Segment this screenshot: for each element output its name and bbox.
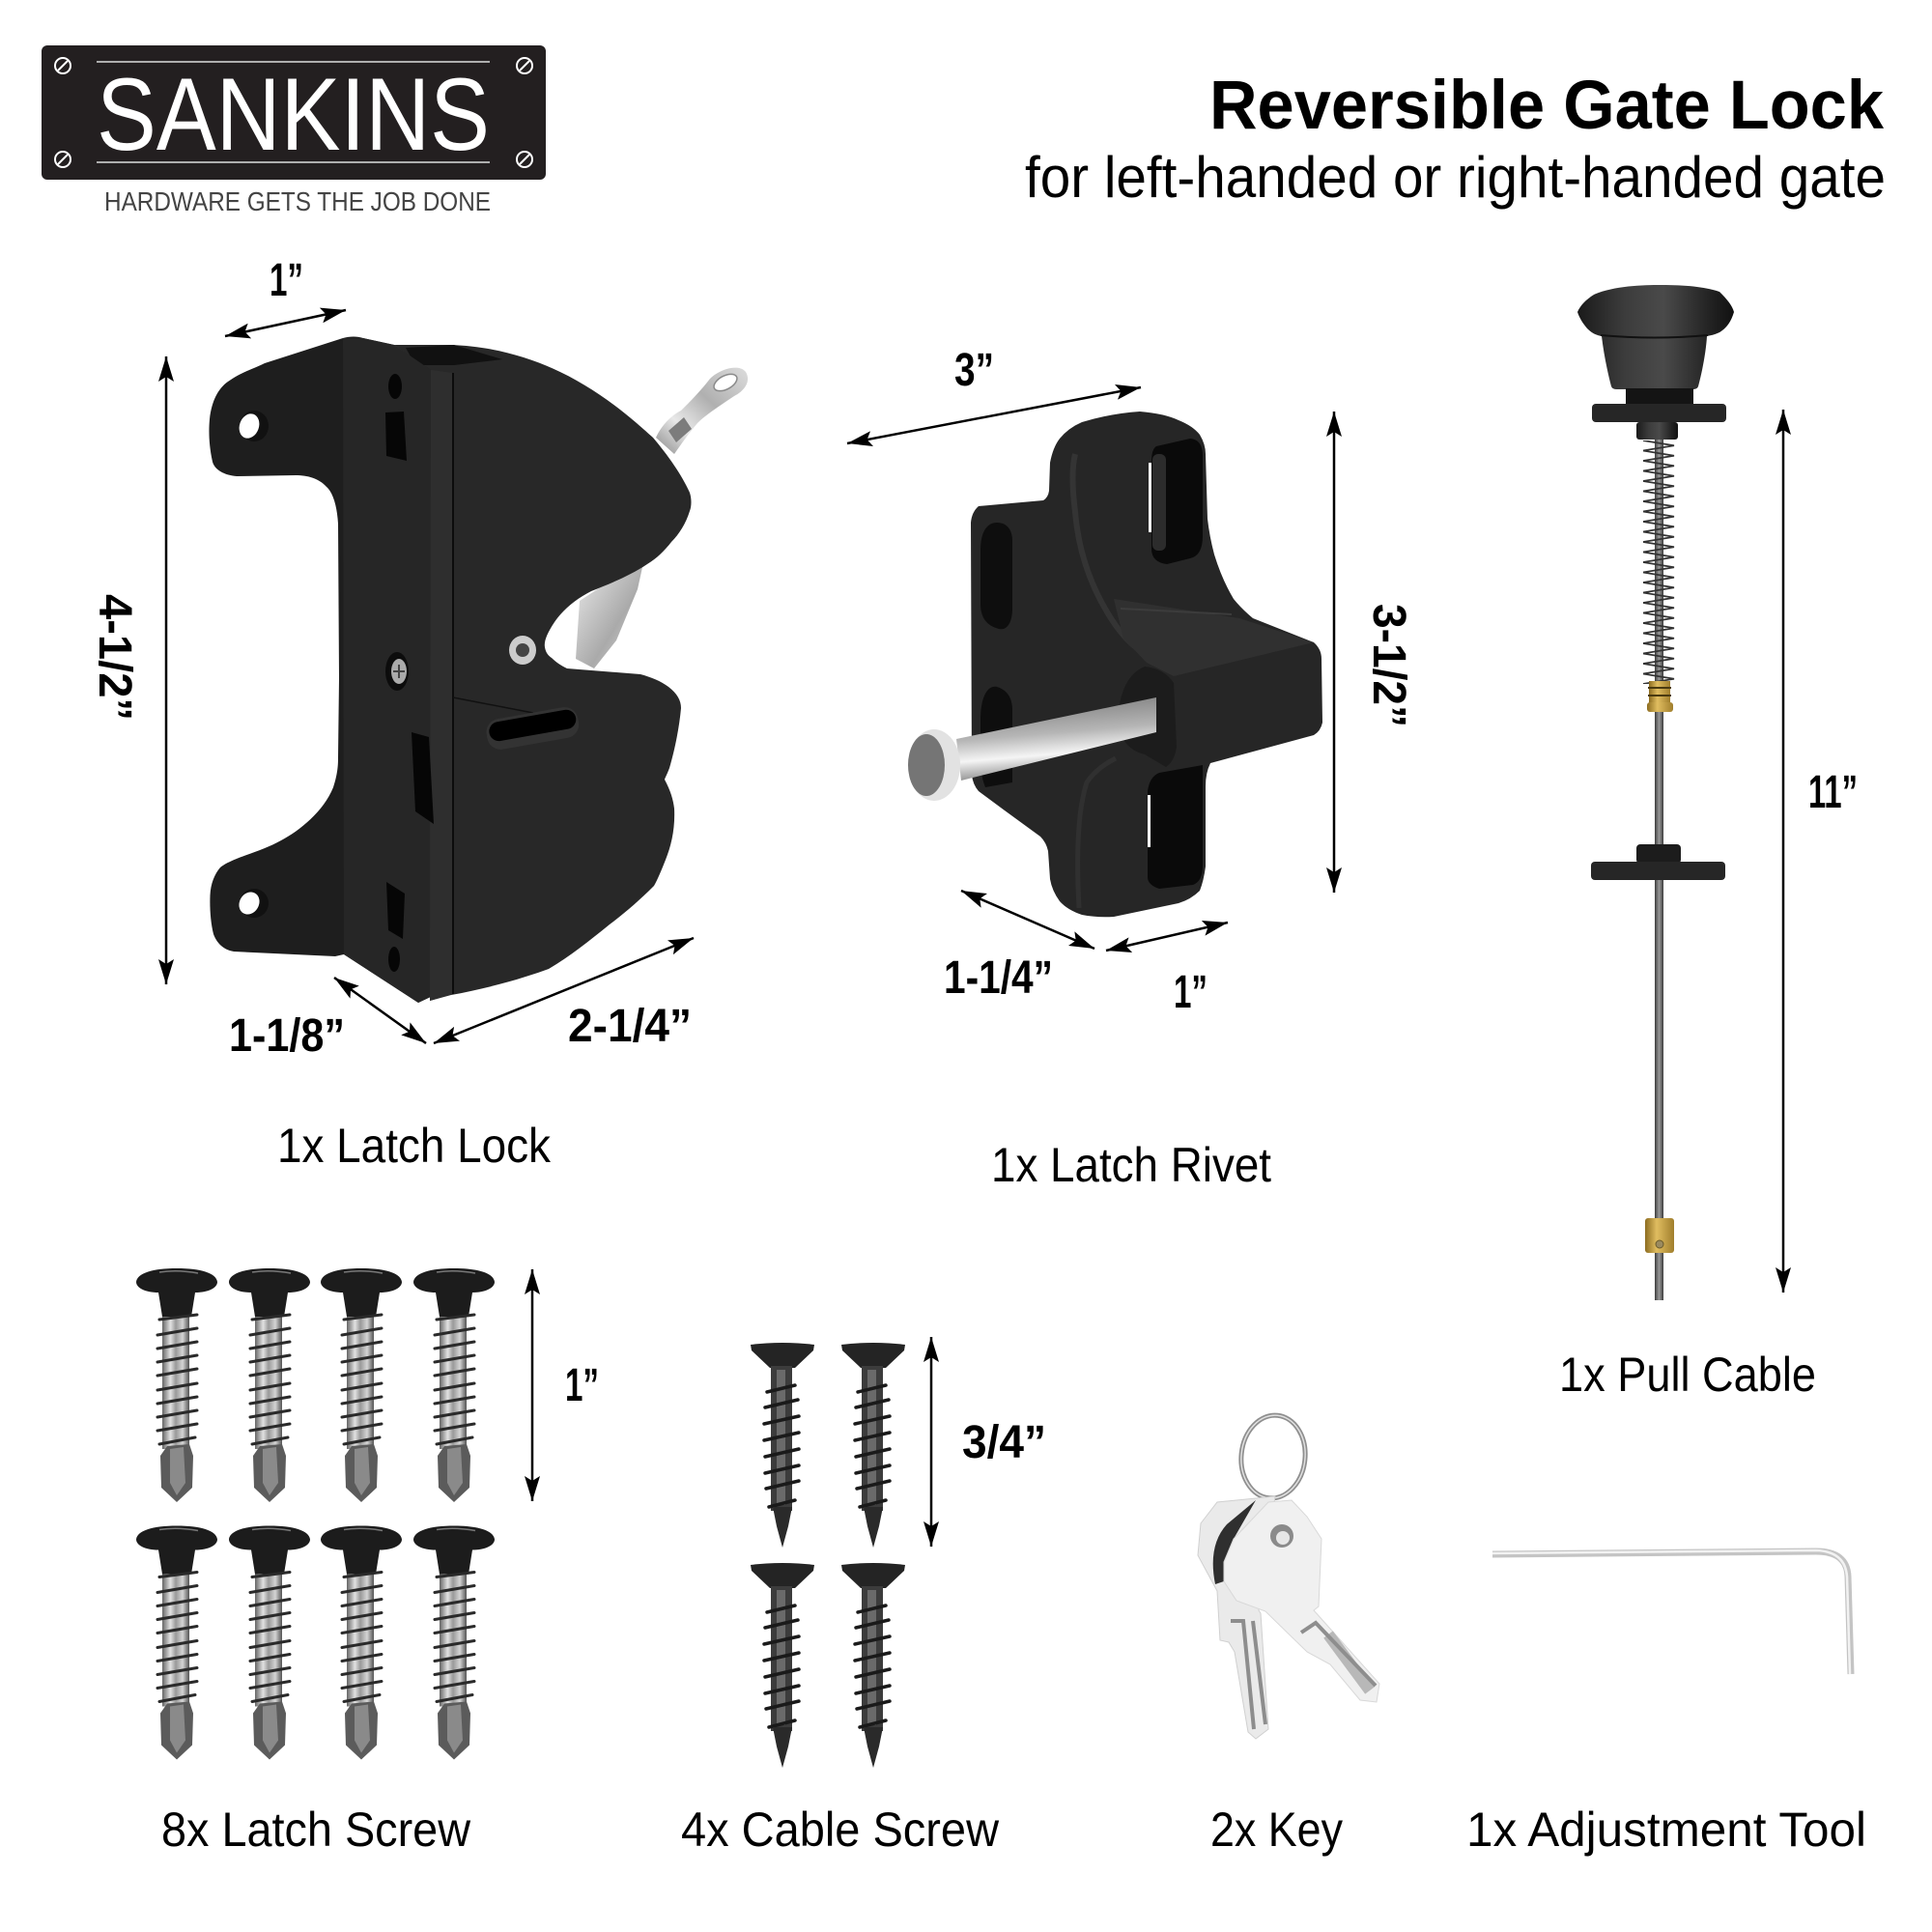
- label: 2-1/4 inch: 2-1/4”: [568, 1001, 692, 1052]
- bottom slot: [1148, 765, 1203, 889]
- logo plate: [42, 45, 546, 180]
- bracket holes: [235, 411, 269, 918]
- key slot: [484, 705, 581, 752]
- spring: [1642, 440, 1675, 684]
- label: 11 inch: 11”: [1808, 767, 1858, 818]
- logo screws: [55, 58, 532, 167]
- label: 4-1/2 inch: 4-1/2”: [89, 594, 140, 721]
- caption: latch screw: 8x Latch Screw: [161, 1803, 471, 1857]
- tagline: HARDWARE GETS THE JOB DONE: [104, 186, 491, 216]
- dimension arrows: [166, 310, 1783, 1547]
- bracket: [209, 336, 435, 1003]
- arrow: latch screw length: [531, 1269, 533, 1501]
- brass ferrule: [1647, 681, 1673, 712]
- back key: [1198, 1496, 1275, 1739]
- label: 3 inch: 3”: [954, 345, 994, 396]
- pull tab: [656, 368, 748, 454]
- ridge highlight: [1072, 454, 1159, 662]
- metal blade: [576, 558, 644, 668]
- label: 1-1/4 inch: 1-1/4”: [944, 952, 1053, 1004]
- front plate: [343, 338, 435, 1003]
- label: 3/4 inch: 3/4”: [962, 1417, 1046, 1468]
- block front: [1118, 667, 1177, 767]
- caption: latch rivet: 1x Latch Rivet: [991, 1138, 1271, 1192]
- label: screw 1 inch: 1”: [565, 1360, 599, 1411]
- latch rivet: [908, 412, 1322, 917]
- left slots: [980, 523, 1012, 787]
- rivet body: [971, 412, 1322, 917]
- cable rod: [1655, 440, 1663, 1300]
- plate openings: [385, 374, 434, 972]
- pin shaft: [956, 697, 1156, 781]
- part captions: [161, 1119, 1866, 1857]
- caption: pull cable: 1x Pull Cable: [1559, 1348, 1816, 1402]
- pull cable: [1577, 285, 1734, 1300]
- caption: cable screw: 4x Cable Screw: [681, 1803, 1000, 1857]
- keys: [1198, 1412, 1379, 1739]
- arrow: cable length: [1782, 410, 1784, 1293]
- knob: [1577, 285, 1734, 389]
- arrow: cable screw length: [930, 1337, 932, 1547]
- arrow: rivet depth: [961, 891, 1094, 949]
- adjustment tool: [1492, 1550, 1851, 1674]
- label: 1 inch: 1”: [270, 255, 303, 306]
- key edge shadow: [1213, 1500, 1256, 1584]
- arrow: latch 1 inch: [225, 310, 346, 336]
- caption: adjustment tool: 1x Adjustment Tool: [1466, 1803, 1866, 1857]
- arrow: latch height: [165, 356, 167, 984]
- pin head: [908, 729, 960, 801]
- brass clamp: [1645, 1218, 1674, 1253]
- label: rivet 1 inch: 1”: [1174, 967, 1208, 1018]
- subtitle: for left-handed or right-handed gate: [1025, 145, 1886, 210]
- key ring: [1237, 1412, 1309, 1501]
- arrow: rivet height: [1333, 412, 1335, 893]
- side strip: [430, 370, 453, 1001]
- caption: key: 2x Key: [1210, 1803, 1343, 1857]
- latch screws: [136, 1268, 495, 1760]
- arrow: rivet 3 inch: [847, 387, 1141, 443]
- upper flange: [1592, 404, 1726, 422]
- knob neck: [1626, 388, 1693, 405]
- wordmark: SANKINS: [97, 56, 490, 172]
- arrow: latch depth: [334, 978, 426, 1043]
- logo rules: [97, 62, 490, 162]
- logo: [42, 45, 546, 216]
- lower flange: [1591, 844, 1725, 880]
- grip face: [1114, 599, 1314, 676]
- cable screws: [751, 1343, 905, 1768]
- phillips screw: [385, 652, 409, 691]
- lock body: [394, 345, 692, 1001]
- arrow: rivet width: [1106, 923, 1228, 951]
- grommet: [509, 636, 536, 665]
- label: 1-1/8 inch: 1-1/8”: [229, 1010, 345, 1062]
- top slot: [1149, 439, 1203, 564]
- front key: [1224, 1500, 1379, 1702]
- title: Reversible Gate Lock: [1209, 68, 1884, 144]
- collar: [1636, 422, 1678, 440]
- arrow: latch width: [434, 938, 694, 1043]
- latch lock: [209, 336, 748, 1003]
- top vent: [406, 345, 502, 365]
- knob seam: [1601, 335, 1708, 338]
- caption: latch lock: 1x Latch Lock: [277, 1119, 552, 1173]
- label: 3-1/2 inch: 3-1/2”: [1363, 604, 1414, 727]
- dimension labels: [89, 255, 1858, 1468]
